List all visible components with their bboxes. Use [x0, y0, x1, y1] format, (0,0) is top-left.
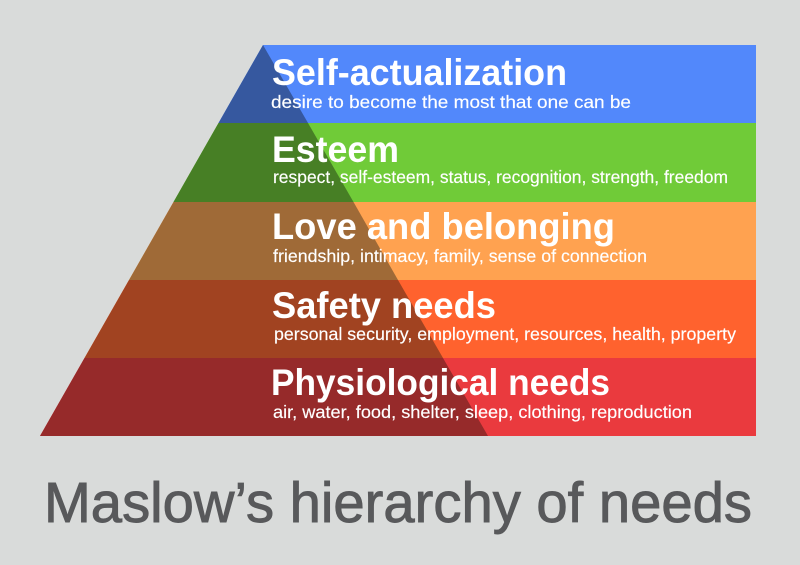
dark triangle: self-actualization — [218, 45, 308, 123]
text: love and belonging description: friendship, intimacy, family, sense of connection — [273, 246, 647, 266]
text: safety needs description: personal security, employment, resources, health, property — [274, 324, 736, 344]
band: physiological needs — [40, 358, 756, 436]
title: Maslow’s hierarchy of needs — [44, 471, 752, 534]
text: self-actualization description: desire to become the most that one can be — [271, 92, 631, 112]
heading: self-actualization: Self-actualization — [272, 51, 567, 93]
pyramid with colored bands — [40, 45, 756, 436]
text: physiological needs description: air, water, food, shelter, sleep, clothing, reproduction — [273, 402, 692, 422]
band: self-actualization — [218, 45, 756, 123]
dark band: physiological needs — [40, 358, 488, 436]
dark band: esteem — [174, 123, 354, 202]
band: safety needs — [84, 280, 756, 358]
text: esteem description: respect, self-esteem, status, recognition, strength, freedom — [273, 167, 728, 187]
dark band: love and belonging — [129, 202, 398, 280]
band: love and belonging — [129, 202, 756, 280]
heading: safety needs: Safety needs — [272, 284, 496, 326]
heading: esteem: Esteem — [272, 128, 399, 170]
band: esteem — [174, 123, 756, 202]
heading: love and belonging: Love and belonging — [272, 205, 615, 247]
dark band: safety needs — [84, 280, 443, 358]
heading: physiological needs: Physiological needs — [271, 361, 610, 403]
